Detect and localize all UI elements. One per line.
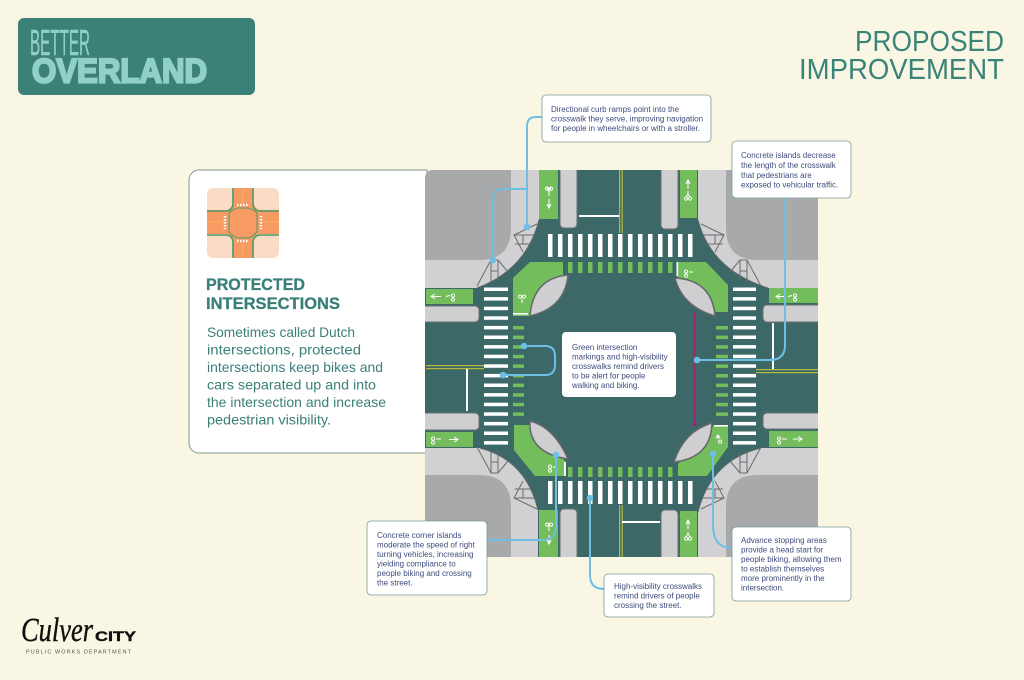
callout: corner islands: people biking and crossing <box>377 569 472 578</box>
text: description: Sometimes called Dutch <box>207 324 355 340</box>
text: description: cars separated up and into <box>207 376 376 392</box>
heading: protected intersections <box>206 276 340 313</box>
stop bars <box>466 215 774 523</box>
callout: green markings: markings and high-visibility <box>572 352 668 362</box>
title: Proposed Improvement: IMPROVEMENT <box>799 54 1004 86</box>
callout: corner islands: turning vehicles, increasing <box>377 550 474 559</box>
medians <box>425 170 818 557</box>
logo: Culver City: Culver <box>21 612 94 649</box>
green bike crossing markings <box>513 262 728 477</box>
text: description <box>207 324 386 428</box>
building blocks <box>425 170 818 557</box>
sidewalks <box>425 170 818 557</box>
logo: Culver City <box>21 612 137 656</box>
icons: bike symbols and lane arrows <box>431 180 802 544</box>
logo: Culver City: CITY <box>95 628 137 644</box>
corner islands: green <box>513 262 728 476</box>
logo: Culver City: PUBLIC WORKS DEPARTMENT <box>26 650 132 656</box>
heading: protected intersections: PROTECTED <box>206 276 305 294</box>
leader dots <box>490 224 716 501</box>
callout: high-visibility crosswalks: remind drivers of people <box>614 592 700 600</box>
callout: concrete islands <box>732 141 851 198</box>
crosswalk: north <box>548 234 692 257</box>
road surface <box>425 170 818 557</box>
callout: advance stopping areas: provide a head start for <box>741 546 824 554</box>
logo: Better Overland <box>18 18 255 95</box>
callout: advance stopping areas: people biking, allowing them <box>741 555 842 564</box>
callout: concrete islands: exposed to vehicular traffic. <box>741 180 838 190</box>
callout: concrete islands: that pedestrians are <box>741 171 812 180</box>
crosswalk: south <box>548 481 692 504</box>
bike lanes <box>426 170 818 557</box>
text: description: intersections, protected <box>207 342 361 358</box>
callout: advance stopping areas <box>732 527 851 601</box>
callout: advance stopping areas: intersection. <box>741 584 784 592</box>
title: Proposed Improvement: PROPOSED <box>855 26 1004 58</box>
crosswalk: east <box>733 288 756 445</box>
centre lines <box>426 170 818 557</box>
callout: high-visibility crosswalks: High-visibility crosswalks <box>614 582 702 591</box>
callout: curb ramps: Directional curb ramps point into the <box>551 105 680 114</box>
callout: high-visibility crosswalks <box>604 574 714 617</box>
callout: curb ramps: crosswalk they serve, improving navigation <box>551 114 703 124</box>
text: description: pedestrian visibility. <box>207 412 331 428</box>
callout: corner islands: the street. <box>377 578 413 588</box>
callout: green markings: to be alert for people <box>572 372 646 380</box>
text: description: intersections keep bikes and <box>207 359 383 375</box>
leader lines <box>487 117 785 589</box>
curb ramps <box>477 224 761 509</box>
callout: high-visibility crosswalks: crossing the street. <box>614 601 682 610</box>
callout: green markings: Green intersection <box>572 343 637 352</box>
callout: advance stopping areas: more prominently in the <box>741 574 825 583</box>
callout: green markings: walking and biking. <box>571 381 640 390</box>
panel: protected intersections <box>189 170 427 453</box>
icon: intersection diagram <box>207 188 279 258</box>
title: Proposed Improvement <box>799 26 1004 86</box>
callout: corner islands <box>367 521 487 595</box>
callout: advance stopping areas: to establish themselves <box>741 564 824 574</box>
island stop lines <box>513 262 728 476</box>
callout: concrete islands: Concrete islands decrease <box>741 151 836 160</box>
logo: Better Overland: OVERLAND <box>32 52 207 90</box>
callout: corner islands: moderate the speed of right <box>377 540 476 550</box>
callout: green markings: crosswalks remind drivers <box>572 362 664 371</box>
concrete corner islands <box>530 275 715 462</box>
crosswalk: west <box>484 288 508 445</box>
callout: green markings <box>562 332 676 397</box>
callout: corner islands: Concrete corner islands <box>377 531 461 540</box>
purple line <box>692 312 697 428</box>
sidewalk curb edges <box>477 220 768 512</box>
callout: advance stopping areas: Advance stopping areas <box>741 536 827 545</box>
callout: concrete islands: the length of the crosswalk <box>741 161 837 170</box>
intersection map <box>425 170 818 557</box>
callout: curb ramps: for people in wheelchairs or with a stroller. <box>551 124 700 133</box>
callout: corner islands: yielding compliance to <box>377 560 456 568</box>
logo: Better Overland: BETTER <box>30 22 90 63</box>
callout: curb ramps <box>542 95 711 142</box>
heading: protected intersections: INTERSECTIONS <box>206 295 340 313</box>
text: description: the intersection and increase <box>207 394 386 410</box>
